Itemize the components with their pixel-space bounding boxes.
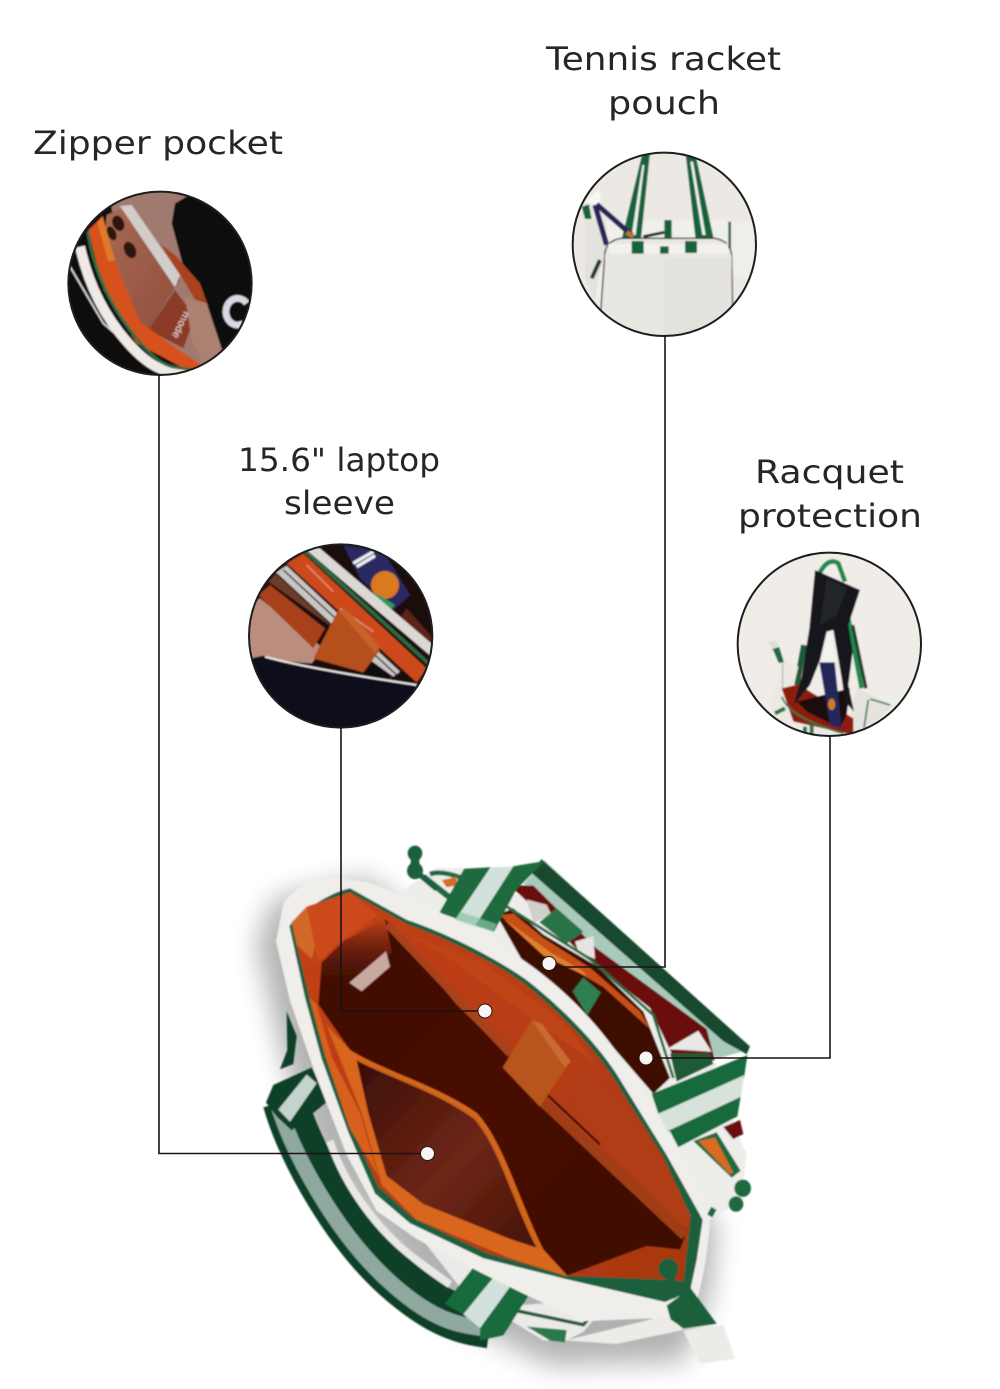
heading: tennis racket pouch: pouch [608, 84, 720, 122]
heading: racquet protection: protection [738, 497, 922, 535]
marker dot: tennis racket pouch [542, 956, 556, 970]
heading: tennis racket pouch: Tennis racket [545, 40, 781, 78]
heading: tennis racket pouch [545, 40, 781, 122]
illustration: open tote bag [257, 846, 751, 1365]
partition wall [387, 924, 685, 1236]
front strap [278, 1101, 490, 1328]
heading: zipper pocket: Zipper pocket [33, 124, 283, 162]
drawstring knot top [407, 846, 437, 889]
icon: zipper pocket photo circle [67, 190, 253, 376]
zipper pocket [327, 1026, 568, 1277]
lower right side panel [677, 1120, 747, 1220]
bottom flap [350, 1148, 683, 1344]
sleeve lining folds [570, 1064, 690, 1228]
right handle band [652, 1055, 747, 1147]
icon: racquet protection photo circle [736, 552, 922, 737]
left handle loop [266, 1012, 328, 1130]
front handle band [445, 1265, 530, 1340]
marker dot: racquet protection [639, 1051, 653, 1065]
bag body white rim [276, 877, 710, 1321]
connector line: racquet protection [646, 736, 830, 1058]
icon: tennis racket pouch photo circle [572, 152, 757, 337]
marker dot: zipper pocket [420, 1146, 434, 1160]
zipper pull and tag [658, 1258, 735, 1364]
connector line: zipper pocket [159, 375, 427, 1154]
heading: racquet protection: Racquet [755, 453, 904, 491]
bag drop shadow [257, 878, 717, 1365]
rear compartment and handle [400, 859, 750, 1218]
upper corner glow [322, 919, 392, 994]
heading: laptop sleeve [238, 441, 440, 522]
marker dot: laptop sleeve [478, 1004, 492, 1018]
green piping [289, 888, 703, 1302]
orange lining [291, 892, 691, 1281]
icon: laptop sleeve photo circle [248, 543, 434, 729]
laptop strap tab [503, 1020, 571, 1107]
care label [349, 951, 390, 991]
heading: laptop sleeve: 15.6" laptop [238, 441, 440, 479]
connector line: laptop sleeve [341, 727, 485, 1011]
drawstring knot right [707, 1180, 751, 1217]
main compartment dark interior [318, 919, 687, 1276]
icon: zipper pocket photo circle: mode [169, 309, 191, 340]
lining highlights [292, 892, 597, 1176]
heading: laptop sleeve: sleeve [284, 484, 395, 522]
heading: racquet protection [738, 453, 922, 535]
connector line: tennis racket pouch [549, 335, 665, 967]
